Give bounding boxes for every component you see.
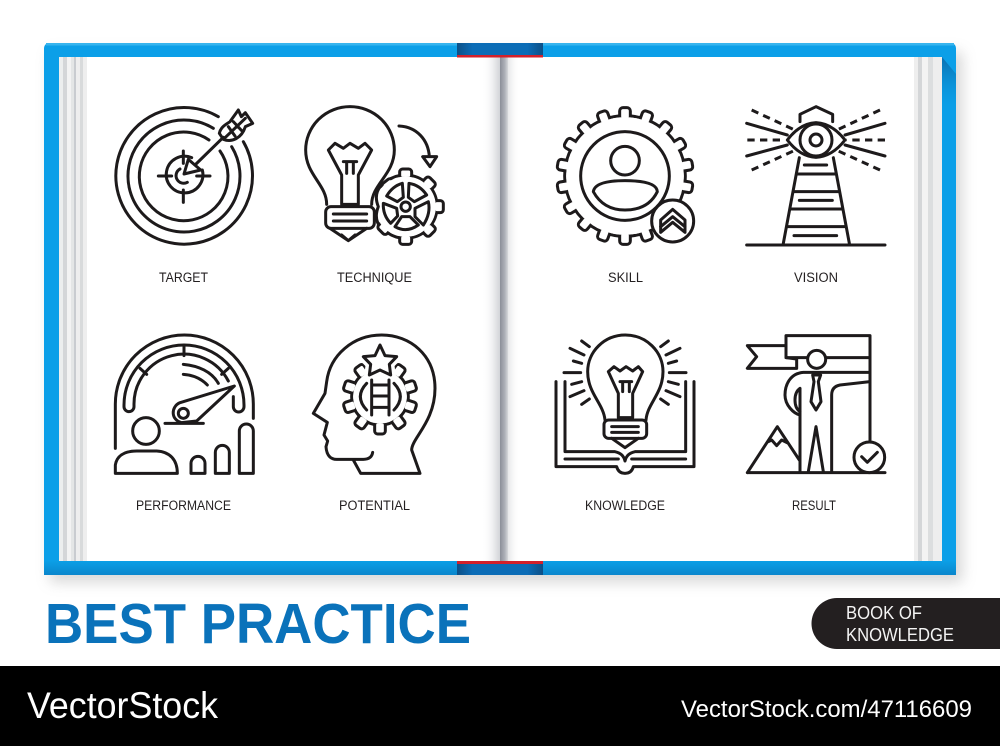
label: performance: PERFORMANCE <box>136 498 231 513</box>
icon: technique <box>306 107 443 244</box>
spine tab bottom <box>457 561 543 575</box>
pill badge <box>812 598 1000 649</box>
label: vision: VISION <box>794 270 838 285</box>
footer url: VectorStock.com/47116609 <box>681 696 972 723</box>
gear <box>376 169 443 244</box>
right page edge stripes <box>914 57 942 561</box>
label: skill: SKILL <box>608 270 643 285</box>
gear <box>343 363 417 434</box>
gear <box>557 108 693 244</box>
label: technique: TECHNIQUE <box>337 270 412 285</box>
icon: vision <box>747 107 885 245</box>
book <box>44 43 956 575</box>
pill badge: KNOWLEDGE <box>846 625 954 645</box>
pages <box>59 57 942 561</box>
book shadow <box>50 52 962 582</box>
label: target: TARGET <box>159 270 208 285</box>
label: result: RESULT <box>792 498 836 513</box>
icon: target <box>116 108 253 244</box>
gutter crease <box>500 57 508 561</box>
footer logo: VectorStock <box>27 685 218 726</box>
icon: performance <box>115 335 253 473</box>
gutter shadow left <box>482 57 500 561</box>
gutter shadow right <box>508 57 520 561</box>
footer bar <box>0 666 1000 746</box>
label: knowledge: KNOWLEDGE <box>585 498 665 513</box>
pill badge: BOOK OF <box>846 603 922 623</box>
icon: skill <box>557 108 694 244</box>
blue cover <box>44 43 956 575</box>
spine tab top <box>457 43 543 58</box>
label: potential: POTENTIAL <box>339 498 410 513</box>
icon: knowledge <box>556 335 694 473</box>
icon: result <box>747 336 885 473</box>
left page edge stripes <box>59 57 87 561</box>
title: BEST PRACTICE <box>45 592 471 656</box>
icon: potential <box>313 335 435 473</box>
